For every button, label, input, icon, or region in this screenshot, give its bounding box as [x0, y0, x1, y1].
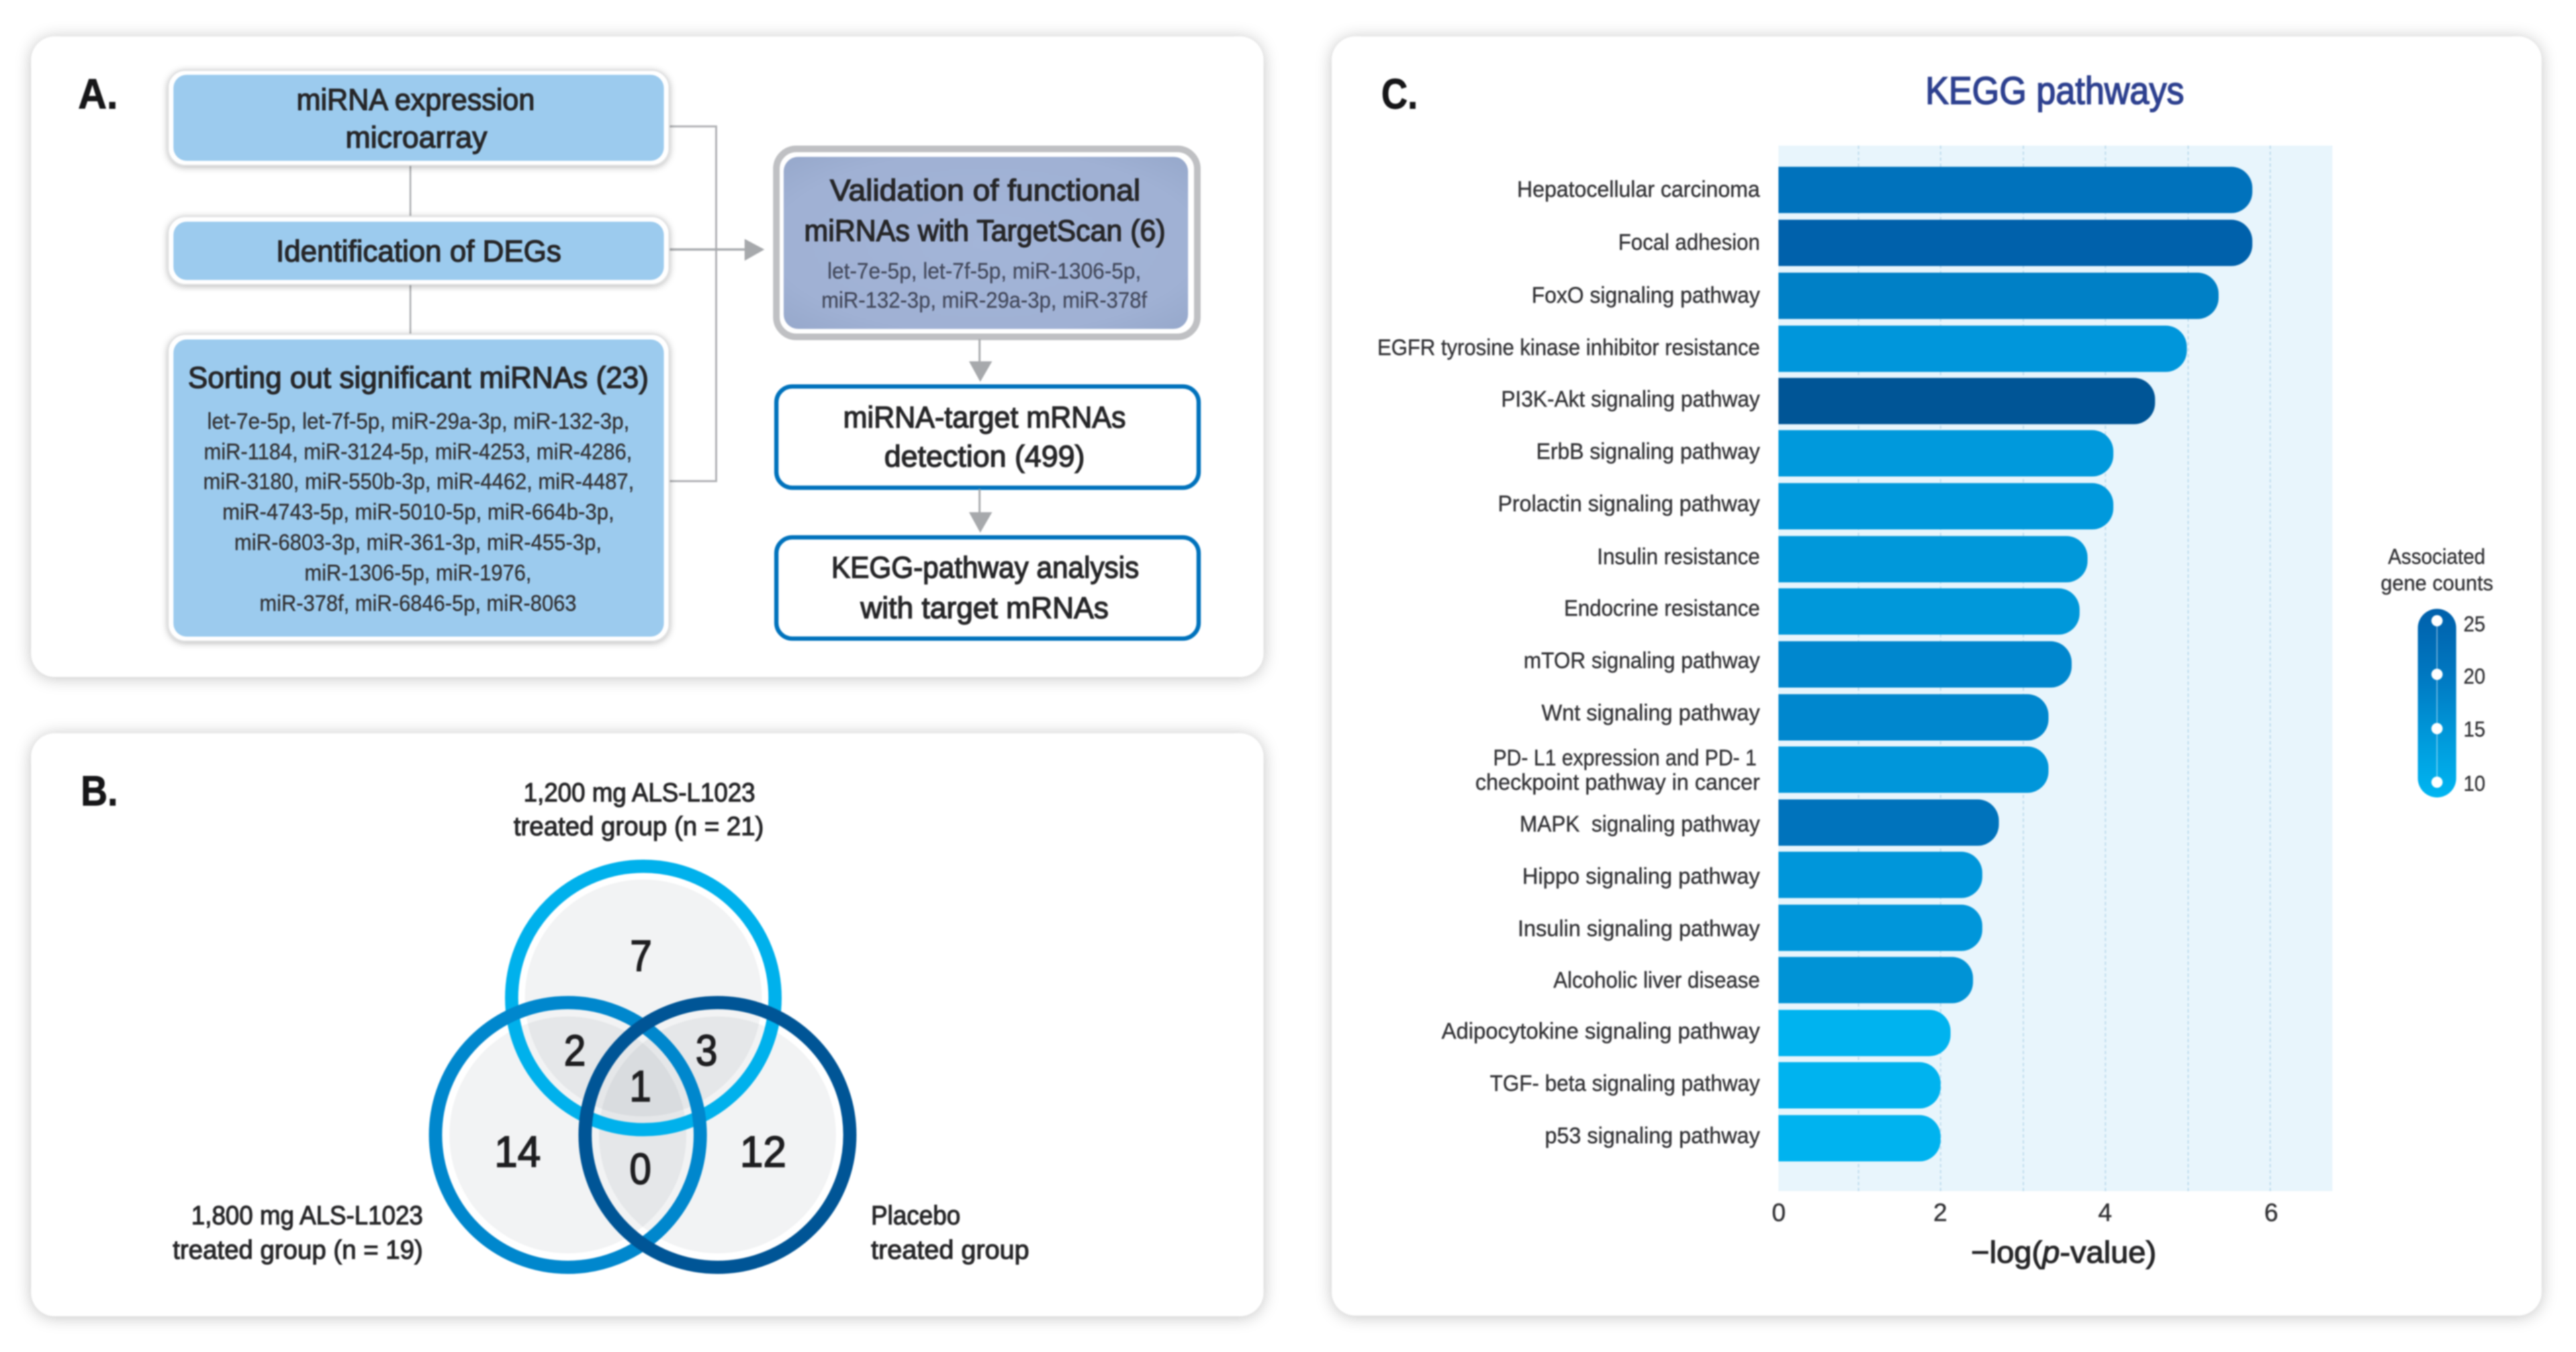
bar row: TGF-beta signaling pathway	[1490, 1062, 1941, 1108]
group label: Placebo	[871, 1201, 1029, 1265]
legend: associated gene counts	[2381, 545, 2493, 797]
bar row: Wnt signaling pathway	[1541, 694, 2048, 741]
group label: 1,200 mg: treated group (n = 21)	[514, 812, 764, 841]
group label: 1,200 mg	[514, 778, 764, 841]
connector: bracket into validation box	[670, 126, 764, 481]
bar row: PI3K-Akt signaling pathway	[1501, 378, 2155, 424]
bar row: FoxO signaling pathway	[1532, 273, 2219, 319]
group label: 1,800 mg: treated group (n = 19)	[173, 1236, 423, 1265]
panel label B: B.	[81, 767, 118, 815]
bar row: mTOR signaling pathway	[1524, 641, 2072, 688]
Venn fills	[449, 879, 836, 1253]
box: Sorting out significant miRNAs: miR-1306-5p, miR-1976,	[304, 561, 531, 586]
group label: 1,800 mg: 1,800 mg ALS-L1023	[191, 1201, 423, 1230]
Venn rings	[436, 866, 850, 1267]
chart title: KEGG pathways	[1925, 69, 2184, 113]
panel label C: C.	[1381, 70, 1418, 118]
Venn counts: 12	[740, 1127, 786, 1176]
box: Validation with TargetScan	[776, 149, 1197, 337]
bar row: Prolactin signaling pathway: Prolactin signaling pathway	[1498, 491, 1760, 516]
bar row: PD-L1 expression and PD-1 checkpoint pathway in cancer: PD- L1 expression and PD- 1	[1493, 745, 1757, 770]
box: miRNA-target mRNAs detection: detection (499)	[884, 439, 1085, 473]
group label: Placebo: treated group	[871, 1236, 1029, 1265]
bar row: Adipocytokine signaling pathway: Adipocytokine signaling pathway	[1442, 1019, 1760, 1044]
box: Sorting out significant miRNAs: miR-4743-5p, miR-5010-5p, miR-664b-3p,	[222, 500, 614, 525]
bar row: p53 signaling pathway: p53 signaling pathway	[1545, 1124, 1760, 1149]
box: miRNA expression microarray: microarray	[345, 120, 487, 154]
box: KEGG-pathway analysis: with target mRNAs	[860, 591, 1109, 625]
bar row: MAPK signaling pathway	[1520, 799, 1999, 846]
bar row: Hippo signaling pathway	[1522, 852, 1982, 898]
Venn counts: 3	[696, 1026, 717, 1075]
x axis tick labels: 2	[1933, 1199, 1947, 1227]
panel A: miRNA workflow	[31, 36, 1264, 677]
bar row: PD-L1 expression and PD-1 checkpoint pathway in cancer: checkpoint pathway in cancer	[1475, 770, 1760, 795]
x axis tick labels: 6	[2264, 1199, 2278, 1227]
panel C: KEGG pathways chart	[1332, 36, 2542, 1316]
legend: associated gene counts: 20	[2463, 664, 2485, 688]
bar row: EGFR tyrosine kinase inhibitor resistance	[1377, 326, 2187, 372]
bar row: p53 signaling pathway	[1545, 1115, 1941, 1161]
Venn counts: 1	[629, 1061, 651, 1110]
bar row: FoxO signaling pathway: FoxO signaling pathway	[1532, 283, 1760, 308]
Venn counts	[494, 931, 786, 1193]
box: Sorting out significant miRNAs: miR-3180, miR-550b-3p, miR-4462, miR-4487,	[203, 469, 634, 494]
group label: Placebo: Placebo	[871, 1201, 960, 1230]
group label: 1,200 mg: 1,200 mg ALS-L1023	[524, 778, 755, 807]
bar row: Hepatocellular carcinoma: Hepatocellular carcinoma	[1517, 177, 1760, 203]
bar row: Prolactin signaling pathway	[1498, 483, 2113, 529]
x axis tick labels: 0	[1772, 1199, 1786, 1227]
bar row: Insulin resistance	[1597, 536, 2088, 582]
bar row: Alcoholic liver disease: Alcoholic liver disease	[1553, 968, 1760, 993]
bar row: Hepatocellular carcinoma	[1517, 167, 2252, 213]
box: miRNA-target mRNAs detection	[776, 386, 1199, 488]
bar row: Endocrine resistance	[1564, 588, 2080, 635]
bar row: TGF-beta signaling pathway: TGF- beta signaling pathway	[1490, 1071, 1760, 1096]
box: Sorting out significant miRNAs: Sorting out significant miRNAs (23)	[188, 361, 649, 394]
panel label A: A.	[78, 70, 118, 118]
box: Validation with TargetScan: let-7e-5p, let-7f-5p, miR-1306-5p,	[827, 259, 1141, 284]
bar row: PD-L1 expression and PD-1 checkpoint pathway in cancer	[1475, 745, 2048, 795]
x axis tick labels: 4	[2098, 1199, 2112, 1227]
box: Sorting out significant miRNAs: miR-1184, miR-3124-5p, miR-4253, miR-4286,	[204, 439, 632, 465]
bar row: Focal adhesion	[1618, 220, 2252, 266]
bar row: MAPK signaling pathway: MAPK signaling pathway	[1520, 811, 1760, 836]
box: miRNA expression microarray	[168, 70, 669, 165]
panel B: Venn diagram	[31, 733, 1264, 1316]
legend: associated gene counts: 15	[2463, 717, 2485, 741]
arrow: detection to KEGG analysis	[969, 489, 992, 533]
legend: associated gene counts: 10	[2463, 772, 2485, 795]
box: Validation with TargetScan: Validation of functional	[830, 173, 1140, 207]
plot background	[1778, 146, 2332, 1191]
bar row: Insulin resistance: Insulin resistance	[1597, 544, 1760, 569]
box: KEGG-pathway analysis	[776, 537, 1199, 639]
bar row: Wnt signaling pathway: Wnt signaling pathway	[1541, 700, 1760, 725]
connector: left column vertical lines	[410, 165, 411, 335]
legend: associated gene counts: gene counts	[2381, 571, 2493, 595]
legend: associated gene counts: 25	[2463, 612, 2485, 636]
bar row: Insulin signaling pathway: Insulin signaling pathway	[1518, 916, 1760, 941]
bar row: Adipocytokine signaling pathway	[1442, 1010, 1951, 1056]
x axis title: −log(p-value)	[1971, 1235, 2156, 1269]
box: Sorting out significant miRNAs: miR-6803-3p, miR-361-3p, miR-455-3p,	[234, 530, 602, 555]
bar row: Insulin signaling pathway	[1518, 905, 1982, 951]
bar row: Focal adhesion: Focal adhesion	[1618, 230, 1760, 255]
box: miRNA-target mRNAs detection: miRNA-target mRNAs	[843, 400, 1126, 434]
box: Sorting out significant miRNAs	[168, 334, 669, 641]
bar row: EGFR tyrosine kinase inhibitor resistance: EGFR tyrosine kinase inhibitor resistance	[1377, 335, 1760, 360]
bar row: mTOR signaling pathway: mTOR signaling pathway	[1524, 649, 1760, 674]
x axis tick labels	[1772, 1199, 2278, 1227]
arrow: validation to detection	[969, 339, 992, 382]
box: miRNA expression microarray: miRNA expression	[297, 83, 535, 116]
bar row: PI3K-Akt signaling pathway: PI3K-Akt signaling pathway	[1501, 386, 1760, 412]
bar row: ErbB signaling pathway: ErbB signaling pathway	[1536, 439, 1760, 465]
bar row: Hippo signaling pathway: Hippo signaling pathway	[1522, 864, 1760, 889]
bar row: Alcoholic liver disease	[1553, 957, 1973, 1003]
box: Identification of DEGs: Identification of DEGs	[276, 234, 561, 268]
box: Sorting out significant miRNAs: miR-378f, miR-6846-5p, miR-8063	[259, 591, 576, 616]
box: KEGG-pathway analysis: KEGG-pathway analysis	[831, 551, 1139, 584]
group label: 1,800 mg	[173, 1201, 423, 1265]
box: Validation with TargetScan: miR-132-3p, miR-29a-3p, miR-378f	[821, 288, 1148, 313]
Venn counts: 7	[630, 931, 652, 980]
bar row: ErbB signaling pathway	[1536, 430, 2113, 476]
Venn counts: 0	[629, 1144, 651, 1193]
bar row: Endocrine resistance: Endocrine resistance	[1564, 596, 1760, 621]
box: Identification of DEGs	[168, 216, 669, 285]
legend: associated gene counts: Associated	[2388, 545, 2485, 568]
box: Sorting out significant miRNAs: let-7e-5p, let-7f-5p, miR-29a-3p, miR-132-3p,	[207, 409, 629, 434]
box: Validation with TargetScan: miRNAs with TargetScan (6)	[804, 214, 1166, 248]
Venn counts: 14	[494, 1127, 541, 1176]
Venn counts: 2	[564, 1026, 586, 1075]
